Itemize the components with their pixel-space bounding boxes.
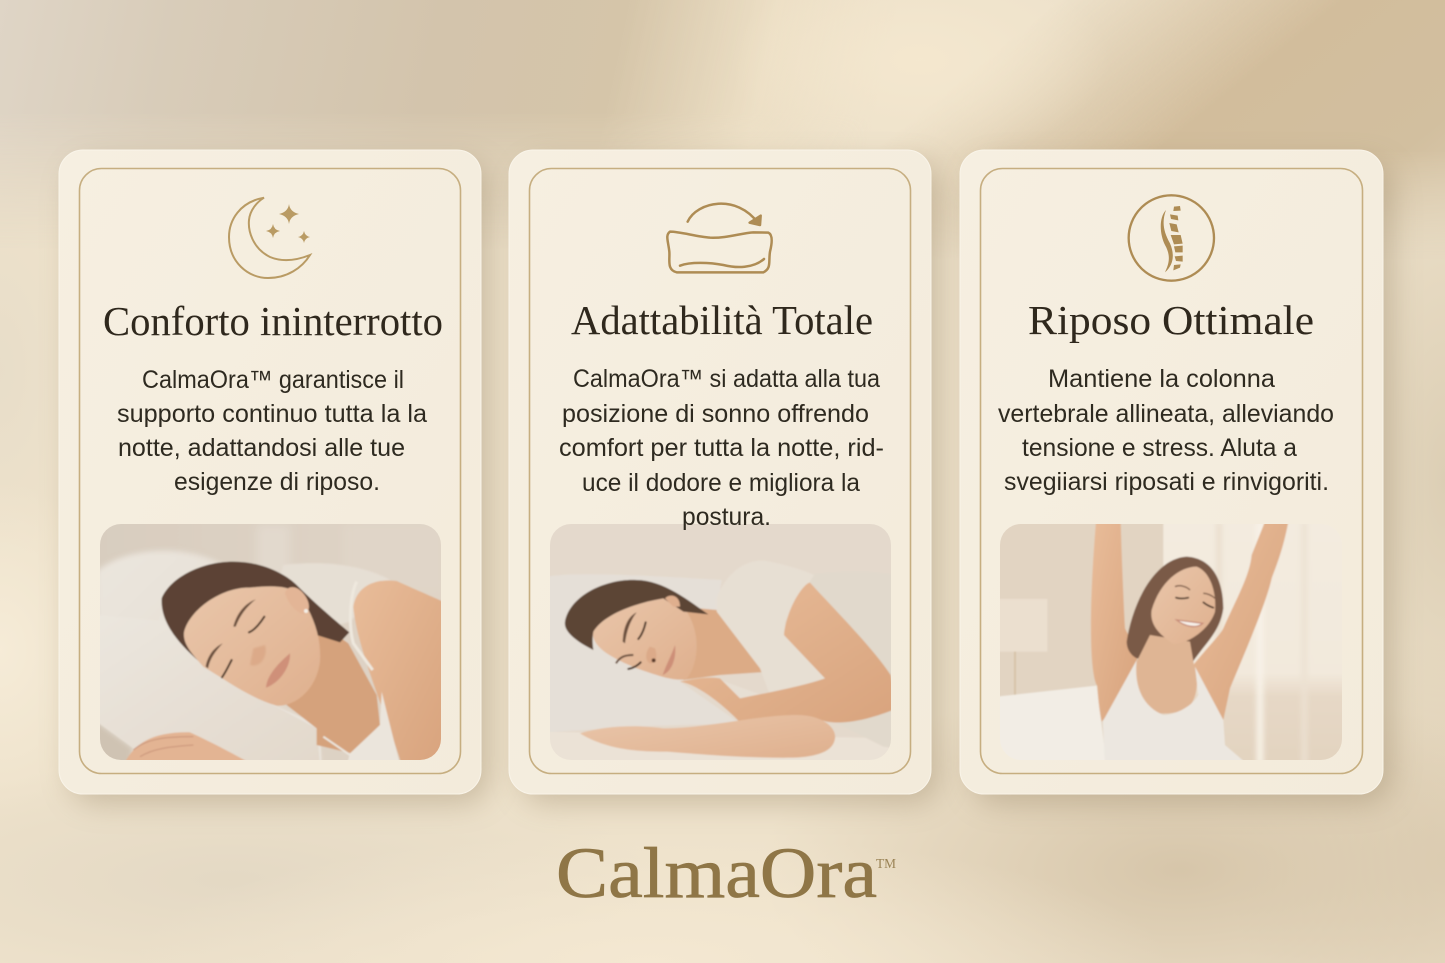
heading: Conforto ininterrotto bbox=[103, 298, 443, 344]
text block: vertebrale allineata, alleviando bbox=[998, 400, 1334, 428]
text block: svegiiarsi riposati e rinvigoriti. bbox=[1004, 468, 1329, 496]
text block: esigenze di riposo. bbox=[174, 468, 380, 496]
icon: pillow with turning arrow bbox=[667, 204, 772, 272]
panel: riposo ottimale bbox=[960, 150, 1392, 803]
text block: notte, adattandosi alle tue bbox=[118, 434, 405, 462]
text block: tensione e stress. Aluta a bbox=[1022, 434, 1297, 462]
photo: woman sleeping on pillow bbox=[97, 522, 447, 765]
text block: CalmaOra™ garantisce il bbox=[142, 366, 404, 394]
text block: postura. bbox=[682, 503, 771, 531]
icon: moon and stars bbox=[229, 198, 310, 278]
text block: posizione di sonno offrendo bbox=[562, 400, 869, 428]
brand logo: CalmaOra bbox=[556, 833, 877, 913]
heading: Riposo Ottimale bbox=[1028, 297, 1314, 343]
photo: woman sleeping on side bbox=[547, 522, 897, 765]
panel: conforto ininterrotto bbox=[59, 150, 490, 803]
text block: uce il dodore e migliora la bbox=[582, 469, 860, 497]
text block: CalmaOra™ si adatta alla tua bbox=[573, 365, 880, 393]
photo: woman stretching awake bbox=[997, 522, 1347, 765]
heading: Adattabilità Totale bbox=[571, 297, 873, 343]
icon: spine in circle bbox=[1129, 195, 1214, 281]
text block bbox=[117, 366, 427, 496]
panel: adattabilita totale bbox=[509, 150, 940, 803]
text block: Mantiene la colonna bbox=[1048, 365, 1275, 393]
text block: comfort per tutta la notte, rid- bbox=[559, 434, 884, 462]
text block: supporto continuo tutta la la bbox=[117, 400, 427, 428]
brand logo: TM bbox=[876, 857, 897, 872]
text block bbox=[559, 365, 884, 531]
text block bbox=[998, 365, 1334, 496]
